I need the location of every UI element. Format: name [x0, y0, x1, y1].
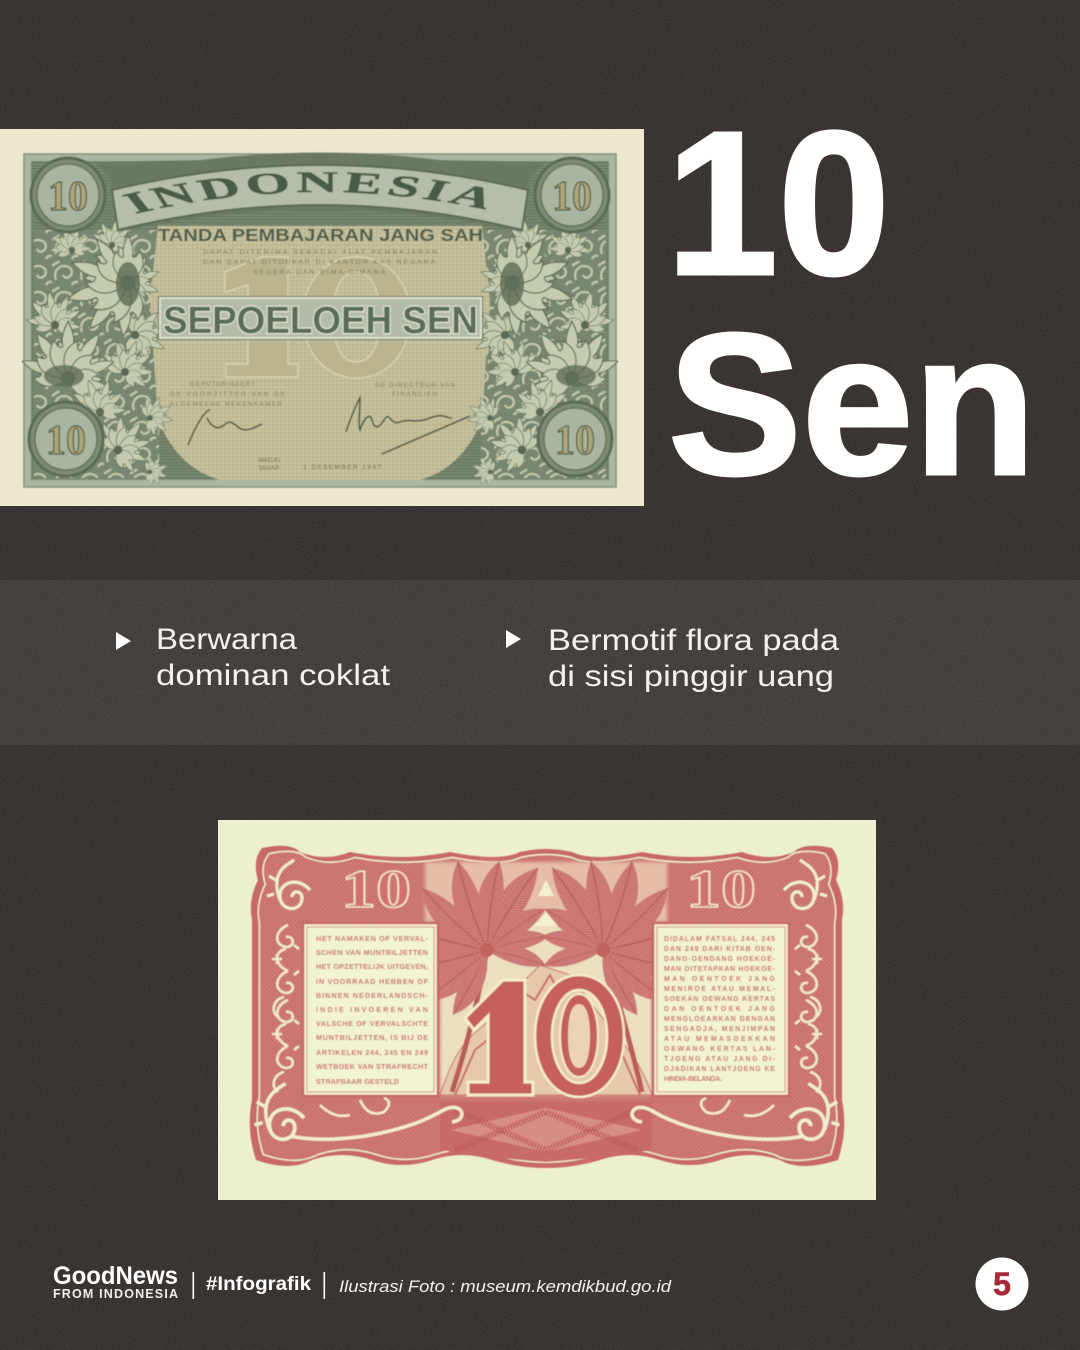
left text panel: INDIE INVOEREN VAN — [316, 1005, 428, 1014]
palm sky area — [425, 862, 667, 1095]
page number badge: 5 — [993, 1266, 1011, 1302]
right text panel: MENIROE ATAU MEMAL- — [664, 986, 776, 993]
centre field — [150, 226, 490, 480]
note frame — [24, 154, 616, 487]
date: MADJU — [258, 457, 281, 464]
right text panel: MENGLOEARKAN DENGAN — [664, 1016, 775, 1023]
banner — [97, 152, 543, 232]
icon: bullet triangle — [116, 632, 131, 650]
mountain — [440, 965, 652, 1095]
signature text and signatures — [170, 381, 470, 454]
left text panel: HET OPZETTELIJK UITGEVEN, — [316, 962, 428, 971]
foliage right — [462, 210, 628, 487]
right text panel: SOEKAN OEWANG KERTAS — [664, 996, 775, 1003]
wreaths — [267, 860, 827, 908]
left text panel: HET NAMAKEN OF VERVAL- — [316, 934, 429, 943]
icon: bullet triangle — [506, 630, 521, 648]
date — [258, 457, 381, 472]
footer tag: #Infografik — [206, 1274, 311, 1295]
right text panel: DANG-OENDANG HOEKOE- — [664, 956, 776, 963]
right text panel: DJADIKAN LANTJOENG KE — [664, 1066, 775, 1073]
fine print: SEGERA DAN DIMA-DIMANA — [253, 269, 385, 276]
right text panel: ATAU MEMASOEKKAN — [664, 1036, 775, 1043]
bullet: flora motif — [506, 624, 839, 693]
left text panel: ARTIKELEN 244, 245 EN 249 — [316, 1048, 428, 1057]
signature text and signatures: ALGEMEENE REKENKAMER — [170, 401, 282, 408]
title: 10 Sen: Sen — [668, 291, 1036, 517]
right text panel — [653, 923, 789, 1096]
bullet: dominant colour: Berwarna — [156, 623, 297, 656]
footer logo: GoodNews from Indonesia: GoodNews — [53, 1262, 178, 1290]
watermark numeral 10 — [225, 257, 410, 378]
title: 10 Sen — [666, 89, 1036, 517]
title: 10 Sen: 10 — [666, 89, 890, 318]
left text panel: STRAFBAAR GESTELD — [316, 1077, 399, 1086]
bottom scrollwork and fern — [255, 1084, 839, 1162]
left text panel: SCHEN VAN MUNTBILJETTEN — [316, 948, 428, 957]
big numeral 10 — [465, 975, 624, 1097]
right text panel: DAN 249 DARI KITAB OEN- — [664, 946, 776, 953]
denomination panel: SEPOELOEH SEN — [163, 300, 478, 342]
footer logo: GoodNews from Indonesia: FROM INDONESIA — [53, 1287, 178, 1301]
bullet: flora motif: Bermotif flora pada — [548, 624, 839, 657]
signature text and signatures: DE VOORZITTER VAN DE — [170, 391, 285, 398]
right text panel: TJOENG ATAU JANG DI- — [664, 1056, 776, 1063]
left text panel: VALSCHE OF VERVALSCHTE — [316, 1019, 428, 1028]
banknote front: green 10 sen — [0, 129, 644, 506]
right text panel: MAN DITETAPKAN HOEKOE- — [664, 966, 776, 973]
small numerals: 10 — [686, 859, 756, 919]
left text panel — [303, 923, 438, 1096]
small numerals: 10 — [341, 859, 411, 919]
right text panel: DIDALAM FATSAL 244, 245 — [664, 936, 775, 943]
left text panel: MUNTBILJETTEN, IS BIJ DE — [316, 1033, 428, 1042]
page number badge — [976, 1258, 1028, 1310]
signature text and signatures: FINANCIEN — [392, 391, 437, 398]
bullet: flora motif: di sisi pinggir uang — [548, 660, 834, 693]
banner: INDONESIA — [122, 172, 487, 214]
left text panel: BINNEN NEDERLANDSCH- — [316, 991, 429, 1000]
note heading: TANDA PEMBAJARAN JANG SAH — [158, 225, 483, 245]
side ornaments — [272, 925, 822, 1092]
date: TAHAP — [258, 465, 279, 472]
bullet: dominant colour: dominan coklat — [156, 659, 391, 692]
signature text and signatures: GEAUTORISEERT — [190, 381, 255, 388]
bullet: dominant colour — [116, 623, 391, 692]
footer divider — [192, 1272, 194, 1299]
photo credit: Ilustrasi Foto : museum.kemdikbud.go.id — [339, 1277, 672, 1296]
right text panel: OEWANG KERTAS LAN- — [664, 1046, 776, 1053]
fine print — [203, 249, 437, 276]
banknote back: red 10 sen — [218, 820, 876, 1200]
signature text and signatures: DE DIRECTEUR VAN — [375, 382, 455, 389]
palm trees — [395, 858, 695, 1092]
right text panel: HINDIA-BELANDA. — [664, 1076, 722, 1083]
fine print: DAPAT DITERIMA SEBAGAI ALAT PEMBAJARAN — [203, 249, 437, 256]
corner medallions — [29, 158, 612, 476]
left text panel: WETBOEK VAN STRAFRECHT — [316, 1062, 429, 1071]
right text panel: SENGADJA, MENJIMPAN — [664, 1026, 775, 1033]
left text panel: IN VOORRAAD HEBBEN OF — [316, 977, 429, 986]
footer divider — [324, 1272, 325, 1299]
right text panel: MAN OENTOEK JANG — [664, 976, 775, 983]
right text panel: DAN OENTOEK JANG — [664, 1006, 775, 1013]
date: 1 DESEMBER 1947 — [303, 464, 381, 471]
foliage left — [12, 210, 178, 487]
red frame — [250, 846, 844, 1168]
footer logo: GoodNews from Indonesia — [53, 1262, 178, 1301]
small numerals — [341, 859, 756, 919]
fine print: DAN DAPAT DITOEKAR DI KANTOR KAS NEGARA — [203, 259, 435, 266]
